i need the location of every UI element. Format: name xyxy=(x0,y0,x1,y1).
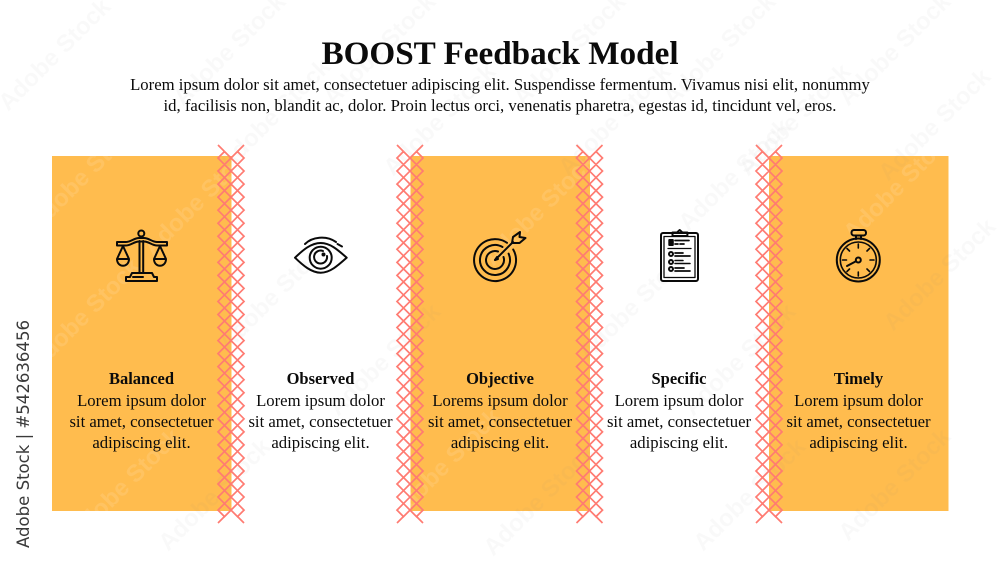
icon: clipboard checklist xyxy=(661,230,698,281)
icon: balance scale xyxy=(117,230,167,281)
text: Adobe Stock xyxy=(573,243,697,366)
icon: eye xyxy=(295,238,347,273)
text: Adobe Stock xyxy=(478,438,602,561)
panel: Timely background xyxy=(769,156,948,511)
lattice divider 3 xyxy=(576,145,602,523)
text: Balanced: Lorem ipsum dolor xyxy=(77,391,206,410)
text: Balanced: adipiscing elit. xyxy=(92,433,191,452)
lattice divider 4 xyxy=(756,145,782,523)
text: Observed: Lorem ipsum dolor xyxy=(256,391,385,410)
text: Adobe Stock xyxy=(323,298,447,421)
text: Specific xyxy=(607,369,751,452)
text: Adobe Stock xyxy=(833,423,957,546)
text: Adobe Stock xyxy=(63,423,187,546)
panel: Balanced background xyxy=(52,156,232,511)
text: Adobe Stock xyxy=(678,298,802,421)
text: Specific: adipiscing elit. xyxy=(630,433,728,452)
text: Adobe Stock xyxy=(23,253,147,376)
text: Timely: sit amet, consectetuer xyxy=(786,412,931,431)
text: Timely: Lorem ipsum dolor xyxy=(794,391,923,410)
text: Adobe Stock xyxy=(378,58,502,181)
lattice divider 1 xyxy=(218,145,244,523)
text: Adobe Stock xyxy=(733,58,857,181)
text: Objective: Lorems ipsum dolor xyxy=(432,391,568,410)
text: Balanced: Balanced xyxy=(109,369,174,388)
stock credit: Adobe Stock | #542636456 xyxy=(14,320,34,548)
panel: Objective background xyxy=(410,156,590,511)
text: Adobe Stock xyxy=(138,138,262,261)
title: BOOST Feedback Model xyxy=(321,35,679,72)
intro text xyxy=(130,75,871,115)
text: Observed: sit amet, consectetuer xyxy=(248,412,393,431)
text: Adobe Stock xyxy=(873,63,997,186)
text: Specific: Lorem ipsum dolor xyxy=(615,391,744,410)
icon: stopwatch xyxy=(837,230,880,282)
text: Objective: adipiscing elit. xyxy=(451,433,549,452)
icon: target with arrow xyxy=(474,232,526,281)
lattice divider 2 xyxy=(397,145,423,523)
text: Adobe Stock xyxy=(23,113,147,236)
text: Specific: Specific xyxy=(652,369,706,388)
text: Adobe Stock xyxy=(153,433,277,556)
intro text: Lorem ipsum dolor sit amet, consectetuer adipiscing elit. Suspendisse fermentum. Vivamus nisi elit, nonummy xyxy=(130,75,871,94)
text: Objective xyxy=(428,369,572,452)
text: Adobe Stock xyxy=(213,53,337,176)
intro text: id, facilisis non, blandit ac, dolor. Proin lectus orci, venenatis pharetra, egestas id, tincidunt vel, eros. xyxy=(164,96,836,115)
text: Timely xyxy=(786,369,931,452)
text: Adobe Stock xyxy=(383,403,507,526)
text: Adobe Stock xyxy=(688,433,812,556)
text: Adobe Stock xyxy=(478,148,602,271)
text: Adobe Stock xyxy=(553,58,677,181)
text: Objective: Objective xyxy=(466,369,534,388)
text: Adobe Stock xyxy=(838,123,962,246)
text: Objective: sit amet, consectetuer xyxy=(428,412,572,431)
text: Balanced xyxy=(69,369,214,452)
text: Specific: sit amet, consectetuer xyxy=(607,412,751,431)
text: Timely: adipiscing elit. xyxy=(809,433,908,452)
text: Adobe Stock xyxy=(673,113,797,236)
text: Observed: Observed xyxy=(287,369,354,388)
text: Adobe Stock xyxy=(878,213,1000,336)
text: Balanced: sit amet, consectetuer xyxy=(69,412,214,431)
text: Adobe Stock xyxy=(213,233,337,356)
text: Observed xyxy=(248,369,393,452)
text: Observed: adipiscing elit. xyxy=(271,433,370,452)
text: Timely: Timely xyxy=(834,369,884,388)
